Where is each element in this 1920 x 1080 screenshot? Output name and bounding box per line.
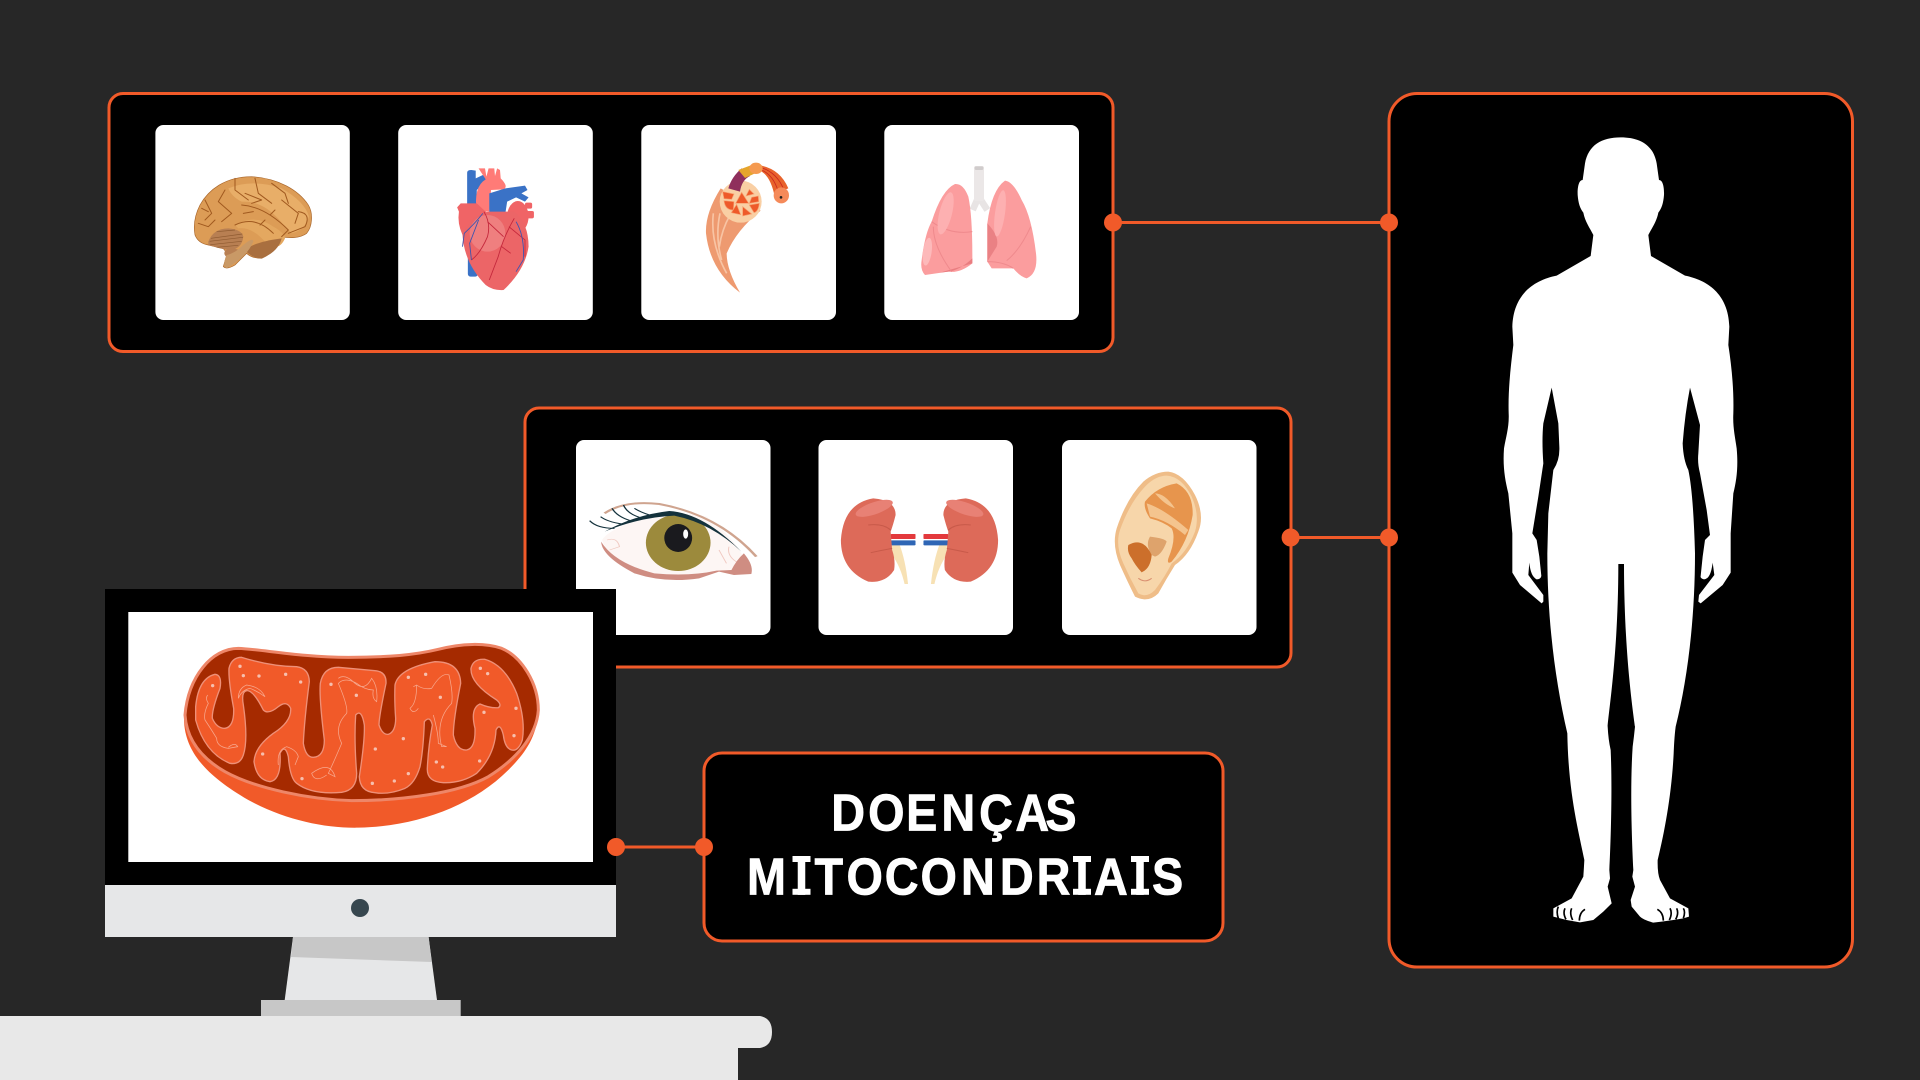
title box [704, 753, 1223, 941]
panel: body silhouette [1389, 94, 1852, 967]
monitor camera [351, 899, 369, 917]
node dots on connectors [1104, 214, 1398, 546]
card: eye [576, 440, 770, 635]
panel: middle organs [525, 408, 1291, 667]
desk [0, 1016, 772, 1080]
title text: DOENÇAS [831, 784, 1077, 842]
monitor [105, 589, 616, 1016]
icon: human body [1504, 137, 1737, 923]
panel: top organs [109, 94, 1113, 352]
card: ear [1062, 440, 1256, 635]
icon: mitochondrion [184, 644, 538, 828]
monitor screen [128, 612, 593, 862]
connector: monitor to title box [607, 838, 713, 856]
card: muscle [641, 125, 836, 320]
monitor stand [261, 937, 461, 1016]
connector: top organ panel to body [1113, 221, 1389, 224]
title text: MITOCONDRIAIS [747, 848, 1183, 906]
title text [747, 784, 1183, 906]
card: kidneys [818, 440, 1013, 635]
connector: middle organ panel to body [1291, 536, 1389, 539]
card: brain [155, 125, 350, 320]
card: lungs [884, 125, 1079, 320]
monitor bezel [105, 589, 616, 885]
card: heart [398, 125, 593, 320]
monitor chin [105, 885, 616, 937]
